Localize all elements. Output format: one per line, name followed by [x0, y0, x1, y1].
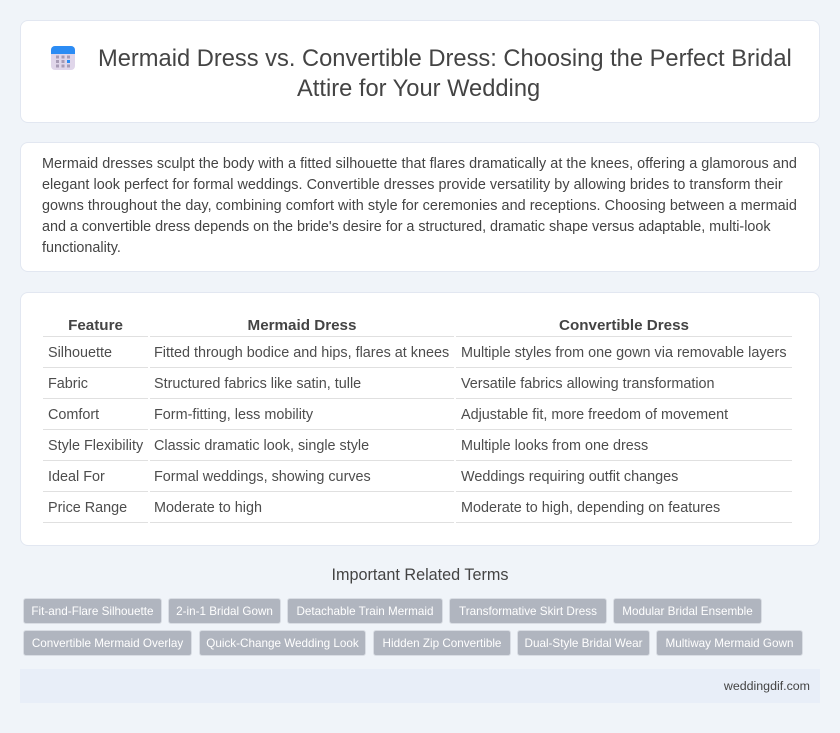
intro text: functionality.	[42, 240, 121, 256]
related terms tags: 2-in-1 Bridal Gown	[176, 605, 273, 618]
panel: introduction	[20, 142, 820, 272]
table header: Mermaid Dress: Mermaid Dress	[248, 317, 356, 334]
related terms tags: Fit-and-Flare Silhouette	[31, 605, 154, 618]
table header: Feature: Feature	[68, 317, 123, 334]
intro text: gowns throughout the day, combining comfort with style for ceremonies and receptions. Choosing between a mermaid	[42, 198, 797, 214]
comparison table: Price Range	[48, 500, 127, 516]
related terms tags: Convertible Mermaid Overlay	[32, 637, 183, 650]
intro text: and a convertible dress depends on the bride's desire for a structured, dramatic shape versus adaptable, multi-look	[42, 219, 770, 235]
related terms tags: Detachable Train Mermaid	[296, 605, 434, 618]
comparison table: Fabric	[48, 376, 88, 392]
title: Attire for Your Wedding	[297, 76, 540, 102]
comparison table: Silhouette	[48, 345, 112, 361]
comparison table: Versatile fabrics allowing transformation	[461, 376, 715, 392]
title	[98, 46, 792, 102]
comparison table: Formal weddings, showing curves	[154, 469, 371, 485]
related terms tags: Modular Bridal Ensemble	[622, 605, 753, 618]
comparison table: Comfort	[48, 407, 99, 423]
comparison table: Multiple styles from one gown via removable layers	[461, 345, 787, 361]
comparison table: Classic dramatic look, single style	[154, 438, 369, 454]
comparison table: Moderate to high, depending on features	[461, 500, 720, 516]
panel: comparison table	[20, 292, 820, 546]
comparison table	[43, 317, 792, 523]
intro text	[42, 156, 797, 256]
comparison table: Moderate to high	[154, 500, 262, 516]
related terms tags: Multiway Mermaid Gown	[666, 637, 793, 650]
comparison table: Form-fitting, less mobility	[154, 407, 313, 423]
title: Mermaid Dress vs. Convertible Dress: Choosing the Perfect Bridal	[98, 46, 792, 72]
related terms heading: Important Related Terms	[332, 566, 508, 584]
related terms tags: Hidden Zip Convertible	[383, 637, 501, 650]
footer bar	[20, 669, 820, 703]
intro text: elegant look perfect for formal weddings. Convertible dresses provide versatility by allowing brides to transform their	[42, 177, 783, 193]
footer source: weddingdif.com	[724, 679, 810, 693]
intro text: Mermaid dresses sculpt the body with a fitted silhouette that flares dramatically at the knees, offering a glamorous and	[42, 156, 797, 172]
comparison table: Structured fabrics like satin, tulle	[154, 376, 361, 392]
panel: title header	[20, 20, 820, 123]
related terms tags	[23, 598, 803, 656]
comparison table: Adjustable fit, more freedom of movement	[461, 407, 728, 423]
related terms tags: Transformative Skirt Dress	[459, 605, 597, 618]
comparison table: Style Flexibility	[48, 438, 143, 454]
table header: Convertible Dress: Convertible Dress	[559, 317, 689, 334]
comparison table: Weddings requiring outfit changes	[461, 469, 678, 485]
comparison table: Fitted through bodice and hips, flares at knees	[154, 345, 449, 361]
comparison table: Multiple looks from one dress	[461, 438, 648, 454]
related terms tags: Dual-Style Bridal Wear	[524, 637, 642, 650]
icon: calendar	[51, 46, 75, 70]
comparison table: Ideal For	[48, 469, 105, 485]
related terms tags: Quick-Change Wedding Look	[206, 637, 359, 650]
